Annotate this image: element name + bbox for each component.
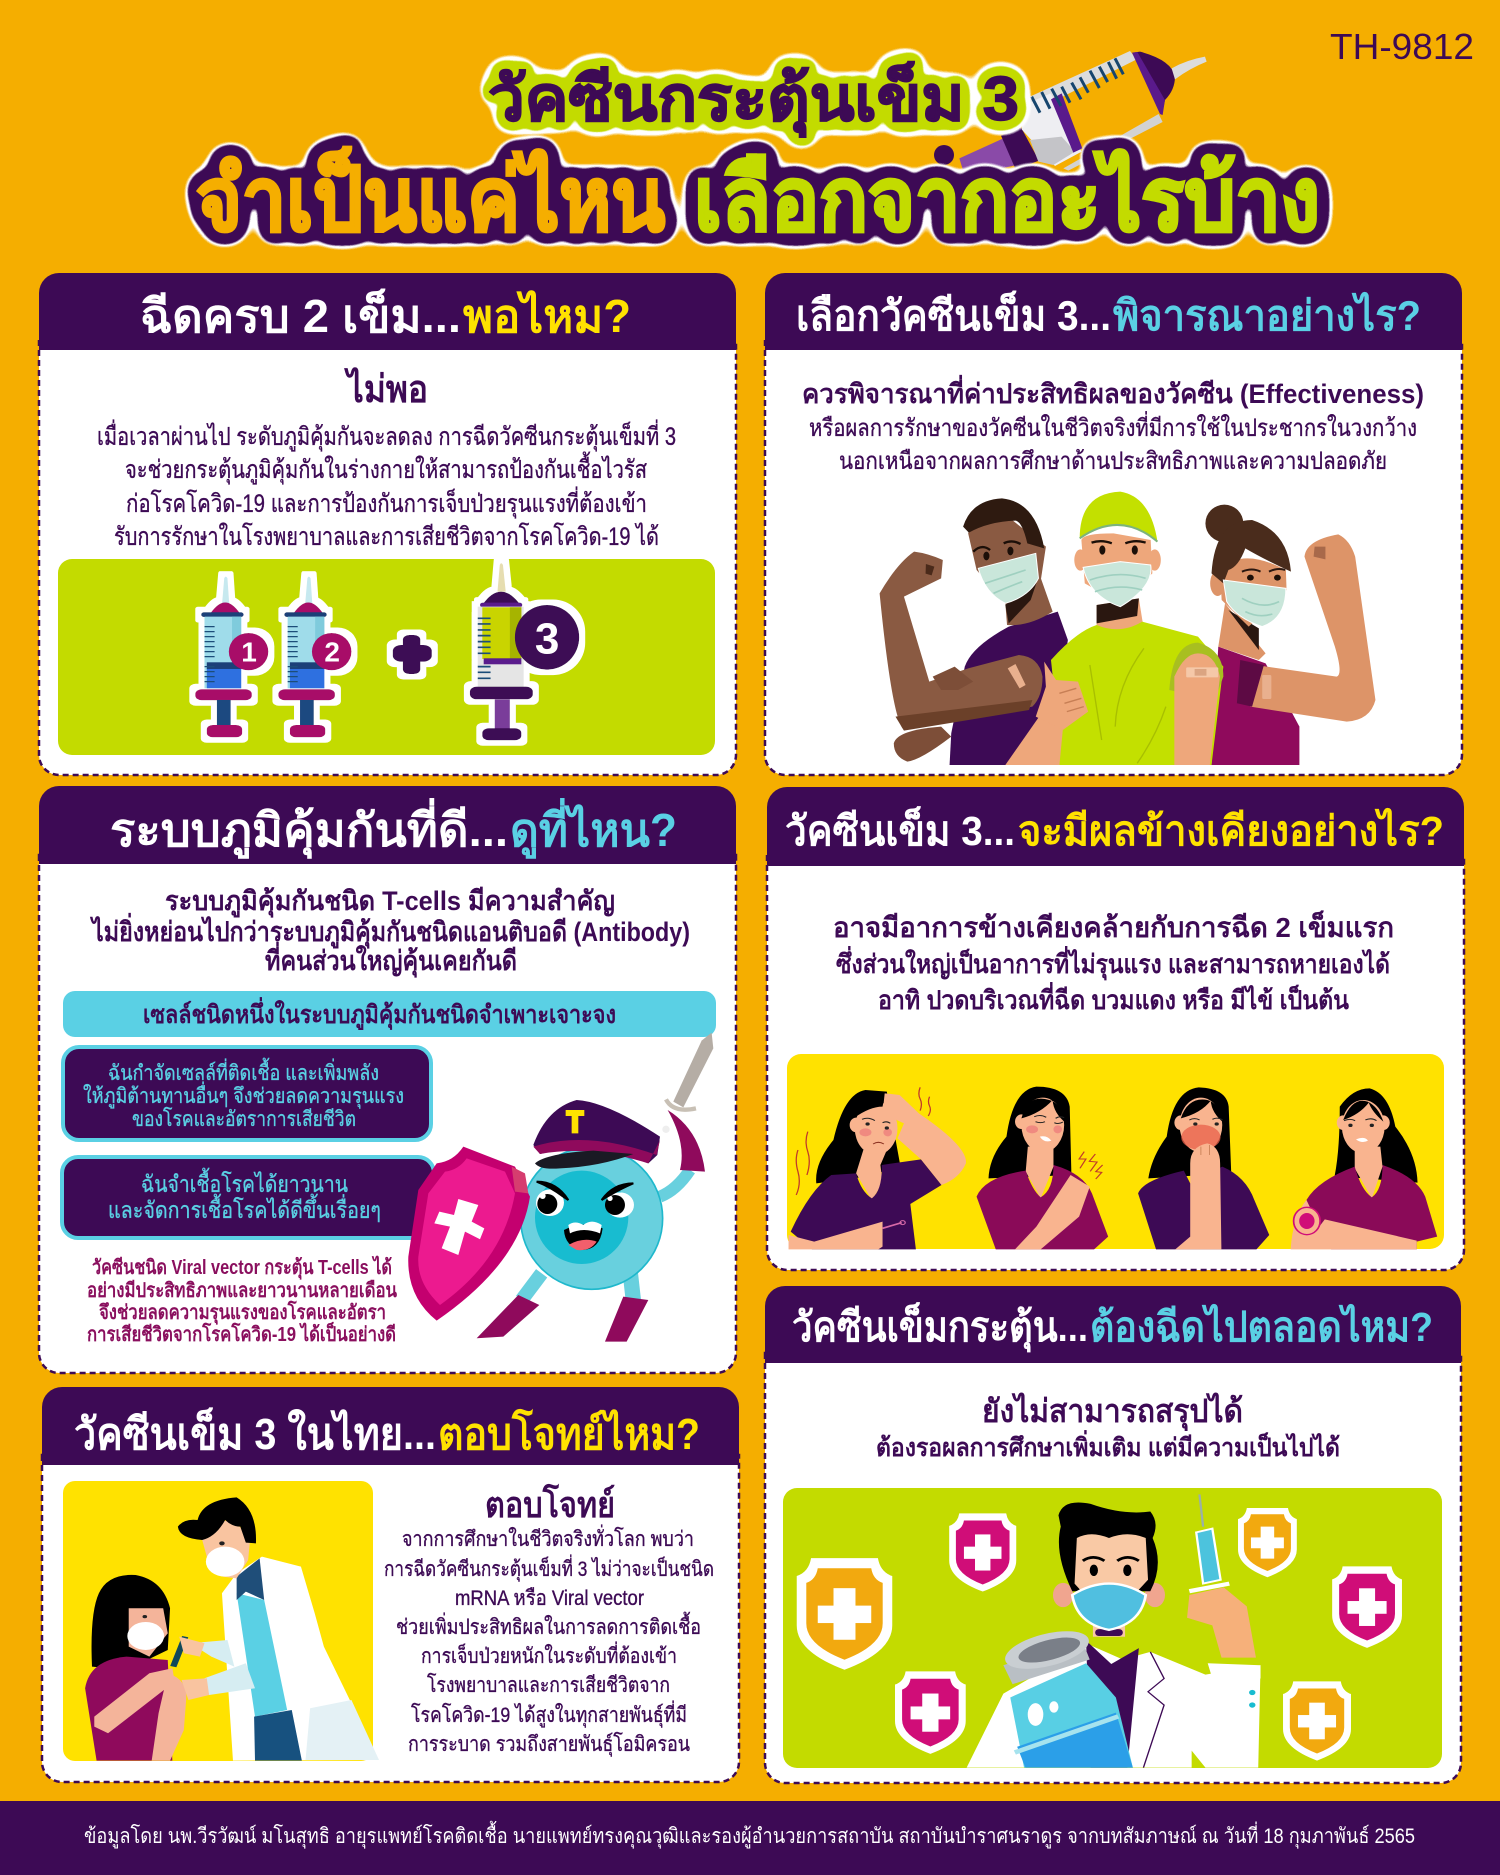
body text: เมื่อเวลาผ่านไป ระดับภูมิคุ้มกันจะลดลง การฉีดวัคซีนกระตุ้นเข็มที่ 3 xyxy=(97,419,676,452)
vaccine vial xyxy=(1000,1624,1133,1768)
syringe 3 xyxy=(470,563,579,740)
panel header: วัคซีนเข็ม 3... xyxy=(785,806,1015,854)
lead text: ควรพิจารณาที่ค่าประสิทธิผลของวัคซีน (Effectiveness) xyxy=(802,374,1424,409)
yellow symptoms panel xyxy=(787,1054,1444,1249)
body text: การระบาด รวมถึงสายพันธุ์โอมิครอน xyxy=(408,1732,690,1757)
body text: รับการรักษาในโรงพยาบาลและการเสียชีวิตจากโรคโควิด-19 ได้ xyxy=(114,522,659,551)
icon: dose syringes: 2 xyxy=(324,637,340,668)
panel header: พอไหม? xyxy=(463,290,631,342)
viral vector note: จึงช่วยลดความรุนแรงของโรคและอัตรา xyxy=(99,1300,386,1325)
panel header: วัคซีนเข็มกระตุ้น... xyxy=(792,1302,1088,1353)
woman with sore mouth xyxy=(1138,1087,1269,1249)
woman with swollen arm xyxy=(1291,1088,1437,1249)
panel header: พิจารณาอย่างไร? xyxy=(1113,291,1421,339)
panel header xyxy=(765,1286,1461,1363)
panel body xyxy=(767,855,1464,1270)
panel: immune system xyxy=(39,786,736,1373)
body text: จะช่วยกระตุ้นภูมิคุ้มกันในร่างกายให้สามารถป้องกันเชื้อไวรัส xyxy=(125,451,647,485)
panel body xyxy=(39,340,736,775)
shields xyxy=(797,1508,1402,1761)
lead text: ไม่ยิ่งหย่อนไปกว่าระบบภูมิคุ้มกันชนิดแอนติบอดี (Antibody) xyxy=(89,912,690,949)
panel header: ดูที่ไหน? xyxy=(510,798,677,859)
body text xyxy=(97,419,676,551)
panel header xyxy=(767,787,1464,866)
viral vector note: วัคซีนชนิด Viral vector กระตุ้น T-cells ได้ xyxy=(92,1255,392,1280)
panel: boosters forever xyxy=(765,1286,1461,1783)
code label: TH-9812 xyxy=(1330,26,1474,67)
panel header: ต้องฉีดไปตลอดไหม? xyxy=(1090,1303,1433,1350)
answer heading: ยังไม่สามารถสรุปได้ xyxy=(982,1392,1243,1432)
panel body xyxy=(42,1455,739,1782)
body text xyxy=(836,945,1390,1015)
syringe 1 xyxy=(195,577,268,737)
syringe 2 xyxy=(278,577,351,737)
panel: two doses enough xyxy=(39,273,736,775)
body text: จากการศึกษาในชีวิตจริงทั่วโลก พบว่า xyxy=(402,1524,694,1551)
doctor xyxy=(967,1494,1261,1768)
title line 2 xyxy=(196,146,1320,249)
cyan definition bar: เซลล์ชนิดหนึ่งในระบบภูมิคุ้มกันชนิดจำเพาะเจาะจง xyxy=(143,997,616,1031)
callout: clears infected cells xyxy=(63,1047,431,1140)
lime illustration backdrop xyxy=(783,1488,1442,1768)
woman with fever xyxy=(789,1087,966,1249)
viral vector note: การเสียชีวิตจากโรคโควิด-19 ได้เป็นอย่างดี xyxy=(87,1321,396,1346)
illustration: doctor vaccinating girl xyxy=(85,1497,379,1761)
illustration: doctor with vaccine and shields xyxy=(797,1494,1402,1768)
lead text: อาจมีอาการข้างเคียงคล้ายกับการฉีด 2 เข็มแรก xyxy=(833,910,1394,943)
panel header: ตอบโจทย์ไหม? xyxy=(438,1407,700,1459)
doctor xyxy=(178,1497,379,1761)
panel body xyxy=(39,855,736,1373)
viral vector note xyxy=(87,1255,397,1346)
body text: โรคโควิด-19 ได้สูงในทุกสายพันธุ์ที่มี xyxy=(411,1700,687,1728)
panel: third dose in Thailand xyxy=(42,1387,739,1782)
panel body xyxy=(765,340,1462,775)
body text: การเจ็บป่วยหนักในระดับที่ต้องเข้า xyxy=(421,1641,677,1668)
body text: ต้องรอผลการศึกษาเพิ่มเติม แต่มีความเป็นไปได้ xyxy=(876,1430,1340,1462)
yellow illustration backdrop xyxy=(63,1481,373,1761)
body text: อาทิ ปวดบริเวณที่ฉีด บวมแดง หรือ มีไข้ เป็นต้น xyxy=(878,981,1349,1015)
body text: ซึ่งส่วนใหญ่เป็นอาการที่ไม่รุนแรง และสามารถหายเองได้ xyxy=(836,945,1390,981)
panel header xyxy=(42,1387,739,1465)
lead text: ระบบภูมิคุ้มกันชนิด T-cells มีความสำคัญ xyxy=(165,886,615,918)
panel: choosing third dose xyxy=(765,273,1462,775)
right woman xyxy=(1205,505,1375,765)
body text xyxy=(384,1524,714,1757)
callout: remembers pathogens: ฉันจำเชื้อโรคได้ยาวนาน xyxy=(141,1168,348,1197)
panel: side effects xyxy=(767,787,1464,1270)
answer heading: ตอบโจทย์ xyxy=(485,1483,615,1525)
callout: remembers pathogens: และจัดการเชื้อโรคได้ดีขึ้นเรื่อยๆ xyxy=(108,1194,381,1223)
illustration: T-cell mascot xyxy=(408,1033,713,1342)
illustration: four symptoms xyxy=(789,1087,1437,1249)
panel header: ระบบภูมิคุ้มกันที่ดี... xyxy=(110,798,508,859)
icon: title syringe xyxy=(934,51,1207,177)
body text: mRNA หรือ Viral vector xyxy=(455,1587,644,1610)
callout: clears infected cells: ฉันกำจัดเซลล์ที่ติดเชื้อ และเพิ่มพลัง xyxy=(108,1058,379,1085)
icon: dose syringes: 1 xyxy=(241,637,257,668)
icon: dose syringes: 3 xyxy=(535,614,559,663)
callout: clears infected cells: ให้ภูมิต้านทานอื่นๆ จึงช่วยลดความรุนแรง xyxy=(83,1081,404,1109)
body text: การฉีดวัคซีนกระตุ้นเข็มที่ 3 ไม่ว่าจะเป็นชนิด xyxy=(384,1554,714,1582)
panel header: จะมีผลข้างเคียงอย่างไร? xyxy=(1018,807,1444,854)
title part: orange: จำเป็นแค่ไหน xyxy=(196,146,665,249)
icon: dose syringes xyxy=(195,563,579,740)
callout: clears infected cells: ของโรคและอัตราการเสียชีวิต xyxy=(132,1107,356,1131)
panel header xyxy=(39,273,736,350)
woman with shoulder pain xyxy=(977,1087,1108,1249)
girl xyxy=(85,1575,186,1761)
plus sign xyxy=(393,635,432,674)
callout: remembers pathogens xyxy=(62,1157,434,1238)
panel header: ฉีดครบ 2 เข็ม... xyxy=(140,288,461,342)
body text: นอกเหนือจากผลการศึกษาด้านประสิทธิภาพและความปลอดภัย xyxy=(839,448,1387,475)
panel body xyxy=(765,1353,1461,1783)
footer xyxy=(0,1801,1500,1875)
body text xyxy=(809,411,1417,475)
center man xyxy=(1005,492,1223,765)
answer heading: ไม่พอ xyxy=(343,367,428,411)
lime dose panel xyxy=(58,559,715,755)
panel header xyxy=(39,786,736,864)
panel header xyxy=(765,273,1462,350)
illustration: three vaccinated people xyxy=(880,492,1375,765)
panel header: เลือกวัคซีนเข็ม 3... xyxy=(796,290,1111,339)
title part: lime: เลือกจากอะไรบ้าง xyxy=(694,150,1320,249)
body text: ก่อโรคโควิด-19 และการป้องกันการเจ็บป่วยรุนแรงที่ต้องเข้า xyxy=(126,486,647,519)
title line 1: วัคซีนกระตุ้นเข็ม 3 xyxy=(488,61,1019,137)
cyan definition bar xyxy=(63,991,716,1037)
left man xyxy=(880,498,1068,765)
body text: โรงพยาบาลและการเสียชีวิตจาก xyxy=(427,1673,670,1697)
lead text: ที่คนส่วนใหญ่คุ้นเคยกันดี xyxy=(265,941,517,978)
panel header: วัคซีนเข็ม 3 ในไทย... xyxy=(74,1407,436,1459)
viral vector note: อย่างมีประสิทธิภาพและยาวนานหลายเดือน xyxy=(87,1279,397,1302)
body text: ช่วยเพิ่มประสิทธิผลในการลดการติดเชื้อ xyxy=(396,1612,701,1639)
lead text xyxy=(89,886,690,978)
